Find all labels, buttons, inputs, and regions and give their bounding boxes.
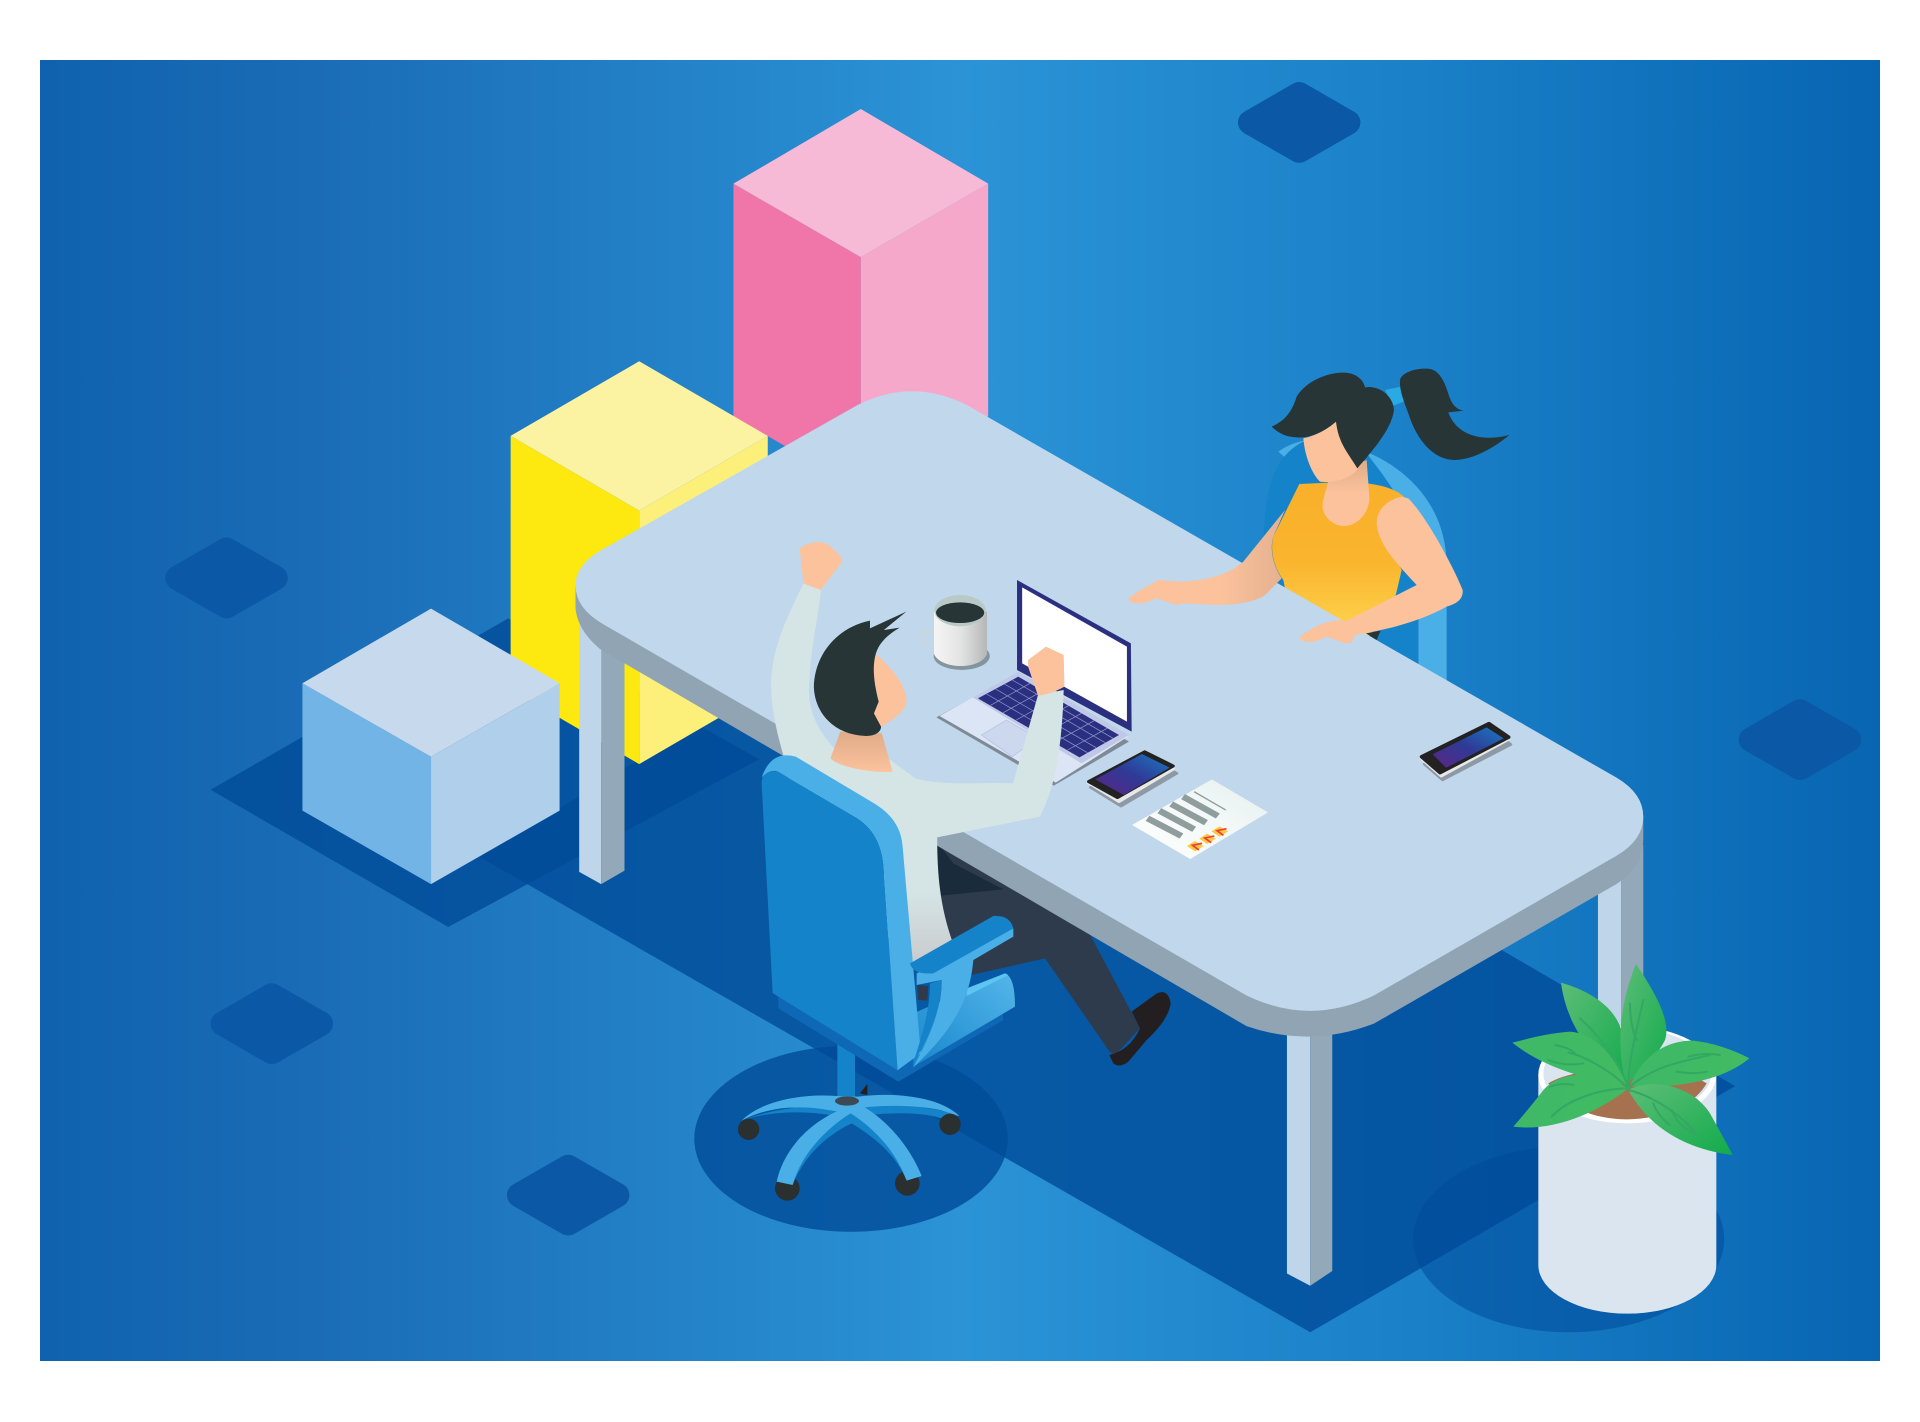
pot body [1538, 1075, 1716, 1314]
soil [1548, 1068, 1707, 1119]
armrest top [910, 916, 1013, 974]
trouser shade [933, 837, 1003, 896]
yellow bar [511, 361, 768, 764]
face [1303, 422, 1358, 482]
seat highlight [967, 973, 1008, 996]
table leg: left [579, 624, 624, 884]
right arm [1300, 497, 1463, 643]
floor diamonds [178, 94, 1849, 1223]
table leg: front [1287, 1016, 1332, 1286]
table side edge [576, 585, 1643, 1037]
shoe [1109, 992, 1171, 1065]
man chair lower parts [738, 973, 1015, 1201]
pink bar [733, 109, 988, 490]
man front fist [1028, 647, 1064, 696]
base hub [835, 1096, 859, 1106]
ponytail [1400, 369, 1509, 460]
armrest gap [917, 985, 928, 1001]
pot rim [1538, 1026, 1716, 1123]
man shirt [771, 583, 1064, 967]
man hair [814, 612, 906, 736]
armrest inner strip [913, 980, 942, 1063]
woman: chair and body [1263, 369, 1509, 687]
rear caster [860, 1084, 867, 1095]
man face [874, 654, 906, 727]
dark clothing below arm [1366, 631, 1381, 640]
table leg: back right [1598, 845, 1643, 1029]
mug [923, 595, 990, 670]
laptop [936, 580, 1132, 786]
document [1132, 779, 1268, 859]
plant pot [1512, 964, 1749, 1314]
light blue box [302, 609, 560, 884]
pot inner [1543, 1028, 1711, 1118]
leaves [1512, 964, 1749, 1155]
floor shadow: boxes [211, 618, 759, 927]
woman chair front [1263, 442, 1418, 670]
base rear arm shade [742, 1103, 959, 1121]
woman chair back [1278, 440, 1447, 687]
chair floor shadow [694, 1046, 1008, 1232]
hair tie [1385, 387, 1404, 406]
seat [913, 973, 1015, 1067]
man neck [830, 732, 893, 772]
casters [738, 1114, 961, 1201]
phone on desk [1088, 751, 1177, 806]
man legs [933, 837, 1171, 1065]
neck and chest [1323, 460, 1369, 526]
floor shadow: table [480, 514, 1735, 1332]
base front arms [777, 1107, 922, 1185]
man chair armrest [910, 916, 1013, 1067]
desk items and man upper body [771, 542, 1268, 967]
armrest support [913, 928, 1013, 1067]
table [576, 391, 1643, 1037]
table top [576, 391, 1643, 1011]
base front arm shade [793, 1113, 908, 1185]
trousers [933, 837, 1140, 1054]
base rear arms [742, 1095, 959, 1121]
man raised fist [800, 542, 842, 590]
left arm [1128, 510, 1285, 605]
man chair back [762, 755, 921, 1070]
hair [1272, 373, 1394, 468]
seat underside [778, 993, 1003, 1082]
woman arms [1128, 497, 1463, 643]
chair column [837, 1037, 855, 1100]
plant floor shadow [1413, 1146, 1724, 1332]
far phone [1422, 724, 1511, 780]
torso [1272, 483, 1404, 640]
